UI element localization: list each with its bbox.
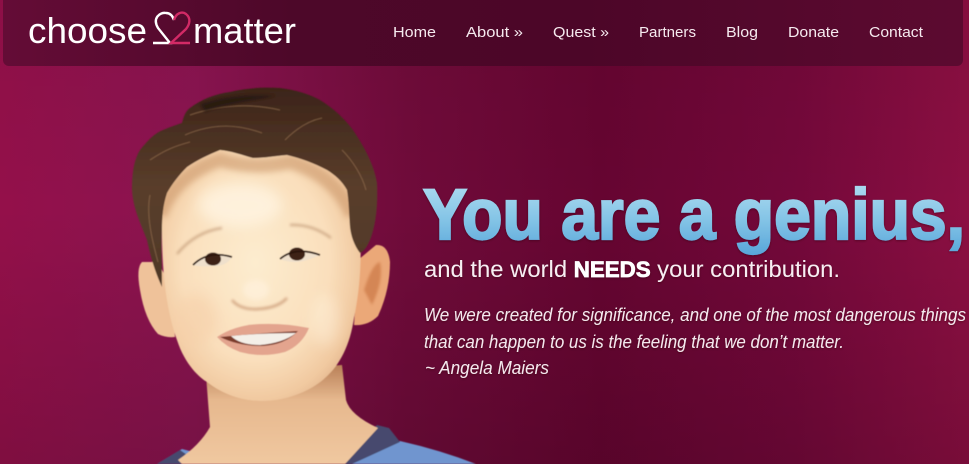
right eyebrow <box>290 225 331 238</box>
dark hair shade <box>200 95 275 112</box>
left upper lid <box>193 255 232 265</box>
forehead hair shadow <box>160 160 352 215</box>
nose <box>232 280 287 309</box>
forehead highlight <box>198 183 282 227</box>
mouth opening <box>220 331 298 346</box>
right upper lid <box>280 251 320 259</box>
right eye white <box>280 251 320 262</box>
left eyebrow <box>177 228 222 254</box>
mouth <box>217 324 309 355</box>
nav: About: About » <box>466 24 523 41</box>
left cheek tone <box>184 296 215 338</box>
right iris <box>289 248 305 260</box>
nav: Partners: Partners <box>639 24 696 41</box>
nav: Donate: Donate <box>788 24 839 41</box>
photo: smiling boy <box>132 88 476 464</box>
nav panel <box>3 0 963 66</box>
shirt <box>157 425 476 464</box>
quote line 2: that can happen to us is the feeling that we don’t matter. <box>424 332 844 352</box>
cheek highlight <box>311 294 339 346</box>
shirt body <box>157 441 476 464</box>
navigation bar <box>3 0 963 66</box>
nav: Quest: Quest » <box>553 24 609 41</box>
face <box>162 140 361 401</box>
subheadline: and the world NEEDS your contribution. <box>424 256 840 282</box>
quote <box>424 305 966 378</box>
logo word: choose: choose <box>28 10 147 51</box>
nose highlight <box>243 280 269 300</box>
nav: Contact: Contact <box>869 24 924 41</box>
neck <box>178 365 378 464</box>
face shading <box>160 160 352 346</box>
right eye <box>280 248 320 262</box>
quote attribution: ~ Angela Maiers <box>425 358 549 378</box>
left ear <box>138 262 175 337</box>
right ear <box>354 245 390 325</box>
nav links <box>393 24 924 41</box>
right ear shadow <box>364 262 381 305</box>
shirt collar <box>157 425 400 464</box>
lips <box>217 324 309 355</box>
left eye <box>193 252 232 266</box>
teeth <box>231 333 296 345</box>
left iris <box>205 252 221 266</box>
nose shadow <box>232 298 287 309</box>
logo word: matter: matter <box>193 10 296 51</box>
nav: Home: Home <box>393 24 436 41</box>
logo heart: left half <box>153 13 174 43</box>
logo heart: numeral two <box>171 13 190 43</box>
nav: Blog: Blog <box>726 24 758 41</box>
logo <box>28 10 296 51</box>
hair <box>132 88 377 287</box>
left eye white <box>193 255 232 266</box>
hair highlights <box>149 106 366 262</box>
